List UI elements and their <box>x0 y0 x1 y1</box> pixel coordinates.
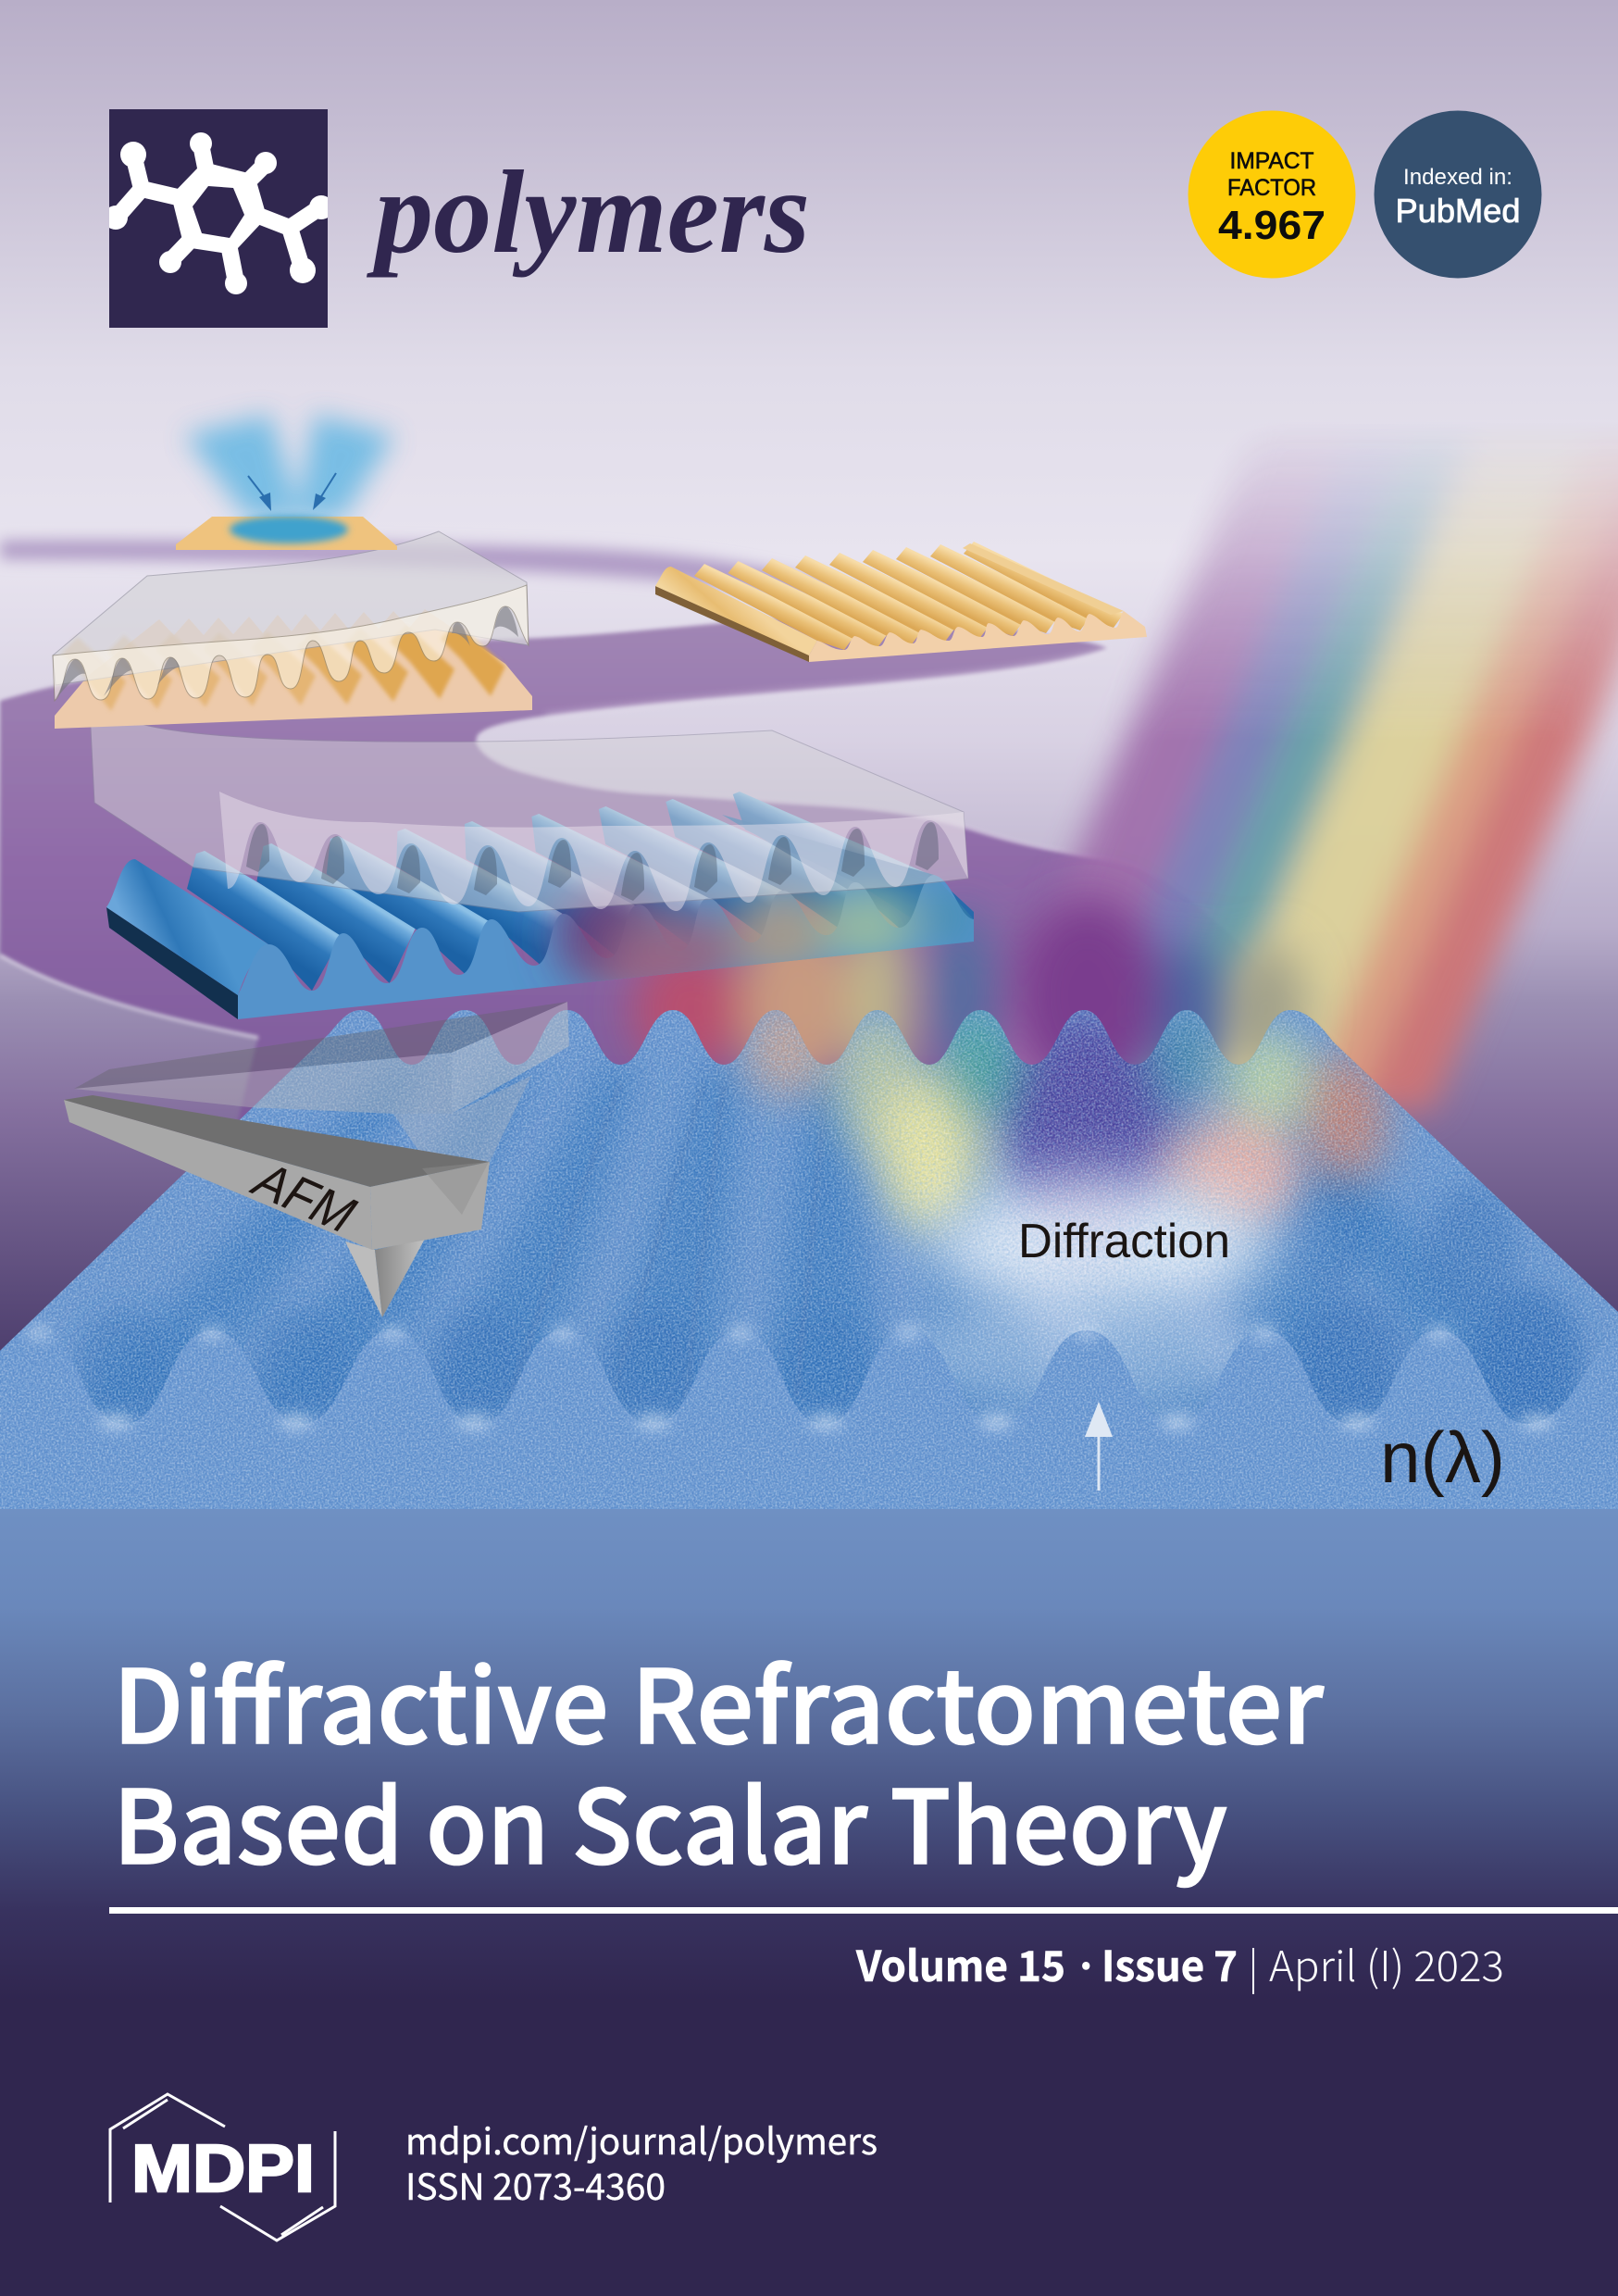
valley streak lines <box>509 1083 827 1398</box>
journal url and ISSN <box>405 2114 877 2211</box>
badge: PubMed <box>1374 111 1542 278</box>
badge: impact factor <box>1189 111 1355 278</box>
badge: PubMed: PubMed <box>1396 192 1520 230</box>
plate front face <box>238 875 974 1019</box>
arrow right <box>313 473 336 510</box>
issue line <box>855 1933 1504 1994</box>
valley shadows <box>65 1065 1592 1416</box>
orange grating upper right <box>655 542 1147 662</box>
ghost side face <box>74 1053 452 1114</box>
cantilever tip right face <box>375 1239 425 1317</box>
cantilever end face <box>370 1162 490 1250</box>
diffraction white glow <box>926 1179 1277 1312</box>
plate left ridge face <box>106 859 268 995</box>
rainbow beam upper right <box>969 417 1618 1111</box>
orange plate side <box>655 586 809 662</box>
MDPI wordmark: MDPI <box>131 2132 315 2206</box>
divider rule <box>109 1907 1618 1914</box>
deep U valley shading <box>76 1167 1583 1435</box>
orange plate ridge stripes <box>694 542 1124 650</box>
issue line: Volume 15 <box>855 1933 1065 1993</box>
plate gold valleys <box>61 622 505 711</box>
logo square <box>109 109 328 328</box>
molecule icon <box>104 132 333 294</box>
ghost AFM cantilever <box>74 1002 569 1215</box>
cantilever side face <box>64 1100 372 1250</box>
mould front surface <box>53 585 529 701</box>
mould back surface <box>90 710 968 912</box>
cantilever tip left face <box>345 1242 382 1317</box>
plate rainbow overlay <box>555 880 969 1002</box>
article title: Based on Scalar Theory <box>113 1745 1227 1893</box>
blue diffraction grating <box>0 995 1618 1518</box>
small plate with UV exposure <box>176 415 397 550</box>
UV beams <box>185 415 394 518</box>
grating dark grain <box>0 1000 1618 1518</box>
blue plate with ridges <box>106 792 974 1019</box>
large translucent mould <box>90 710 968 912</box>
ghost tip <box>393 1076 531 1215</box>
arrow: incident light <box>1085 1402 1113 1491</box>
plate ridge stripes <box>187 792 974 991</box>
lower gradient panel <box>0 1509 1618 2296</box>
MDPI logo <box>110 2094 335 2240</box>
orange plate left face <box>655 567 817 655</box>
mould tooth holes <box>246 822 939 901</box>
journal name: polymers <box>366 146 810 278</box>
badge: impact factor: IMPACT <box>1229 148 1314 174</box>
grating front face <box>0 1330 1599 1452</box>
issue line: Issue 7 <box>1101 1933 1238 1993</box>
hexagon outline <box>110 2094 335 2240</box>
badge: impact factor: FACTOR <box>1227 175 1316 201</box>
logo: molecule square <box>104 109 333 328</box>
label: Diffraction: Diffraction <box>1018 1215 1230 1268</box>
issue line: April (I) 2023 <box>1269 1933 1504 1993</box>
lower white haze <box>907 1296 1259 1407</box>
plate body <box>55 609 532 729</box>
diffraction colour overlay <box>745 995 1386 1259</box>
label: refractive index: n(λ) <box>1380 1416 1505 1498</box>
article title <box>113 1625 1325 1893</box>
journal url and ISSN: mdpi.com/journal/polymers <box>405 2114 877 2165</box>
article title: Diffractive Refractometer <box>113 1625 1325 1773</box>
exposed spot <box>230 516 348 543</box>
orange grating with mould upper left <box>53 531 532 729</box>
AFM label: AFM <box>242 1153 369 1242</box>
ghost tip overlay <box>422 1162 489 1215</box>
purple ribbon <box>0 616 1347 1148</box>
orange plate front face <box>809 611 1147 662</box>
journal url and ISSN: ISSN 2073-4360 <box>405 2159 666 2211</box>
thin purple swoosh <box>0 540 861 602</box>
grating grain texture <box>0 1000 1618 1518</box>
substrate <box>176 517 397 550</box>
issue line: · <box>1074 1933 1099 1993</box>
plate side <box>106 907 238 1019</box>
lower beam behind grating <box>632 898 1305 1092</box>
badge: PubMed: Indexed in: <box>1403 165 1512 190</box>
mould front surface <box>219 792 968 911</box>
background gradient <box>0 0 1618 1518</box>
mould back surface <box>53 531 529 685</box>
grating base <box>0 1010 1618 1424</box>
ghost end face <box>452 1002 569 1114</box>
arrow left <box>248 476 271 511</box>
AFM cantilever <box>64 1095 490 1317</box>
grating highlights <box>27 1329 1553 1428</box>
badge: impact factor: 4.967 <box>1218 203 1326 248</box>
mould tooth holes <box>55 606 518 700</box>
ghost top face <box>74 1002 567 1089</box>
cantilever top face <box>64 1095 490 1187</box>
ribbon white edge lines <box>0 648 1347 1051</box>
